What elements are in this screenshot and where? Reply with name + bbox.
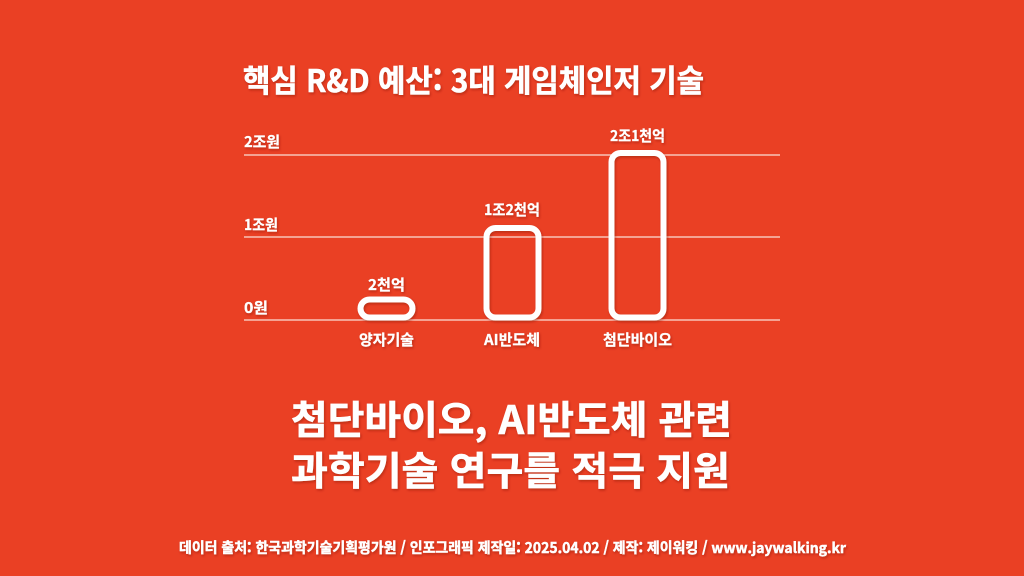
category label: AI반도체: AI반도체 (483, 329, 540, 350)
headline: 과학기술 연구를 적극 지원 (291, 441, 730, 497)
bar: 첨단바이오 (612, 153, 664, 318)
bar chart (244, 125, 780, 350)
headline (291, 390, 732, 497)
y-axis label: 1조원: 1조원 (244, 214, 278, 235)
y-axis label: 0원: 0원 (244, 297, 268, 318)
bar: 양자기술 (360, 300, 412, 318)
bar: AI반도체 (486, 228, 538, 318)
value label: 2조1천억: 2조1천억 (610, 125, 665, 146)
y-axis label: 2조원: 2조원 (244, 131, 280, 152)
value label: 1조2천억: 1조2천억 (484, 199, 540, 220)
value label: 2천억: 2천억 (368, 274, 405, 295)
title: 핵심 R&D 예산: 3대 게임체인저 기술 (243, 56, 704, 101)
footer credits: 데이터 출처: 한국과학기술기획평가원 / 인포그래픽 제작일: 2025.04.02 / 제작: 제이워킹 / www.jaywalking.kr (179, 537, 847, 558)
category label: 첨단바이오: 첨단바이오 (603, 329, 672, 350)
category label: 양자기술: 양자기술 (359, 329, 414, 350)
headline: 첨단바이오, AI반도체 관련 (291, 390, 732, 446)
